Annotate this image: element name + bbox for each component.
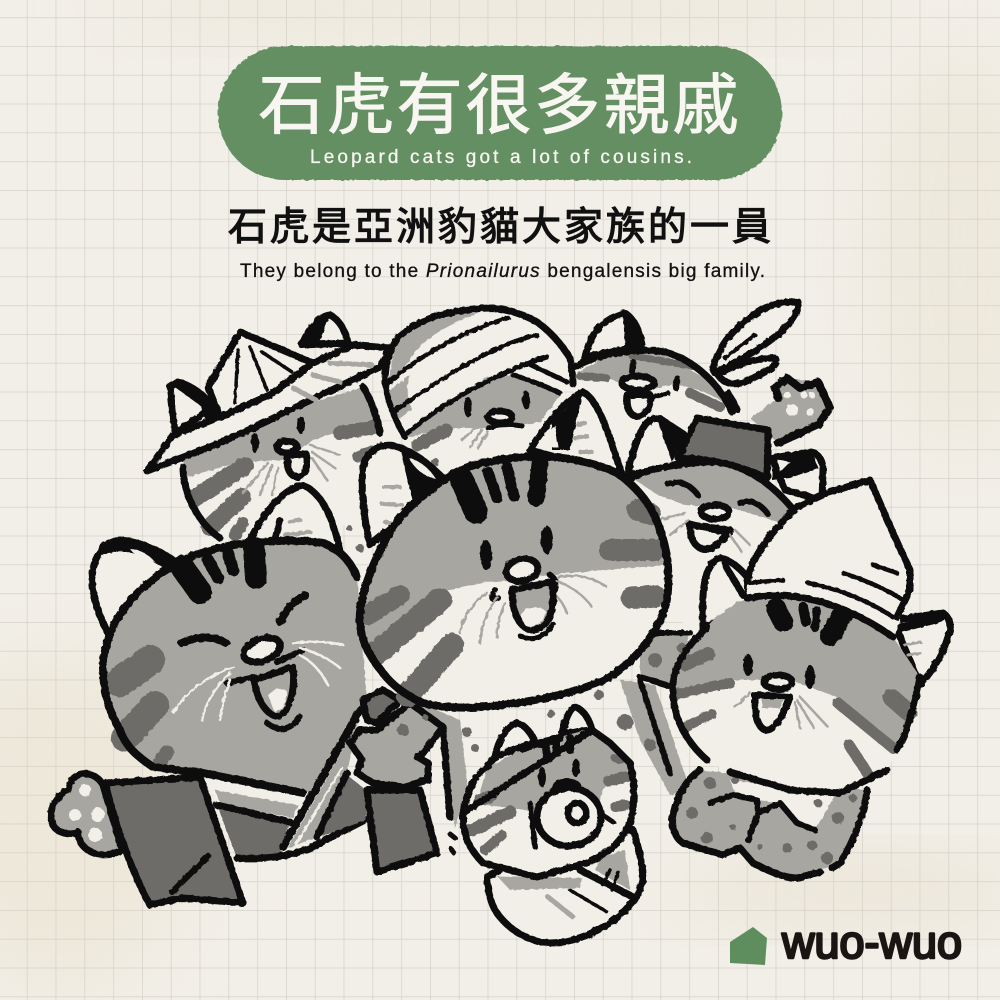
whiskers [660,513,750,552]
robe diagonal [288,722,358,848]
shoulder bar [640,635,690,687]
stripes [677,683,730,694]
ear [585,313,642,357]
illustration: cat family [51,302,950,943]
subheading chinese: 石虎是亞洲豹貓大家族的一員 [228,206,774,249]
whiskers [462,428,488,448]
right ear [772,452,823,500]
nose [488,411,512,423]
eyes [538,767,546,787]
whiskers [460,576,607,643]
stripes [196,466,245,497]
head fill [673,597,920,793]
right sleeve [367,790,437,872]
ear left [92,540,180,637]
collar band [205,778,300,820]
head gray [672,597,920,745]
nose [622,376,654,390]
hat brim [147,345,390,471]
title text: 石虎有很多親戚 [258,68,742,142]
head [183,387,400,545]
shoulder piece [363,690,400,723]
head [573,351,732,470]
body [672,770,867,878]
mouth [690,525,730,549]
cat: white cone hat lower right [672,480,950,878]
forehead stripes [462,480,476,512]
right ear [302,315,348,345]
ear right [250,485,340,552]
subheading english: They belong to the Prionailurus bengalensis big family. [240,261,765,282]
closed eyes [668,482,768,514]
bucket hat [678,418,768,478]
side stripes [610,539,655,561]
cat: bucket hat middle right [628,418,823,640]
head fill [360,457,668,708]
right ear [893,613,950,685]
closed eyes [182,595,305,643]
mouth [287,454,307,477]
left arm [400,703,468,828]
cat: small bottom center [463,707,643,943]
nose [701,505,729,519]
cat: wide hat top left [147,315,400,545]
head [632,462,800,640]
english subtitle: Leopard cats got a lot of cousins. [310,147,692,168]
ears [495,723,535,757]
turban [385,308,573,437]
eyes [743,654,753,676]
lip [267,717,300,729]
nose [556,782,578,792]
spots [346,458,687,752]
logo text: wuo-wuo [781,916,962,968]
left ear [170,382,213,433]
cat: left big in kimono [51,485,450,905]
head outline [360,457,668,708]
right arm [620,680,690,795]
left paw [51,774,122,855]
nose [504,556,540,584]
left ear [362,445,447,545]
scarf shading [497,876,582,890]
logo: wuo-wuo [730,916,962,968]
outline [463,730,634,877]
title banner [218,46,782,180]
donut mouth [537,788,601,846]
right paw [350,703,443,787]
small dashes [450,834,455,853]
robe front [217,805,290,858]
left sleeve [105,777,243,905]
hands [710,795,815,840]
under lip [520,624,553,639]
head [103,541,367,793]
whiskers [173,642,343,720]
eyes [480,540,492,570]
forehead marks [522,738,570,757]
mouth [755,695,790,730]
cat: center big [360,392,668,708]
right ear [530,392,622,475]
cat: feather headdress top right [573,302,830,470]
eyes [464,397,472,417]
cone hat [747,480,910,635]
eyes [632,362,677,388]
whiskers [735,693,828,728]
icon: green house [730,927,767,965]
belly patch [730,780,835,830]
cheeks [492,575,556,599]
small feather [718,358,776,384]
side stripes [120,660,150,682]
left ear [703,558,750,627]
nose [277,441,297,453]
whiskers [243,445,340,495]
body [487,830,643,943]
eyes [251,433,259,453]
head [463,730,634,877]
forehead stripes [182,567,200,592]
raised paw [750,378,830,443]
head gray [360,457,668,655]
head outline [673,627,920,793]
left ear [628,418,685,475]
cat: center arms and spots [346,458,690,853]
head outline [103,541,360,847]
banner pill [218,46,782,180]
cat: turban top center [385,308,585,480]
nose [764,675,792,689]
mouth [488,425,522,428]
nose [240,633,284,667]
mouth [627,395,651,416]
large feather [713,302,798,373]
mouth [254,667,294,716]
stripes [480,797,490,800]
mouth [512,582,553,630]
hat cone [208,332,313,417]
head [405,393,585,480]
forehead stripes [776,608,783,622]
